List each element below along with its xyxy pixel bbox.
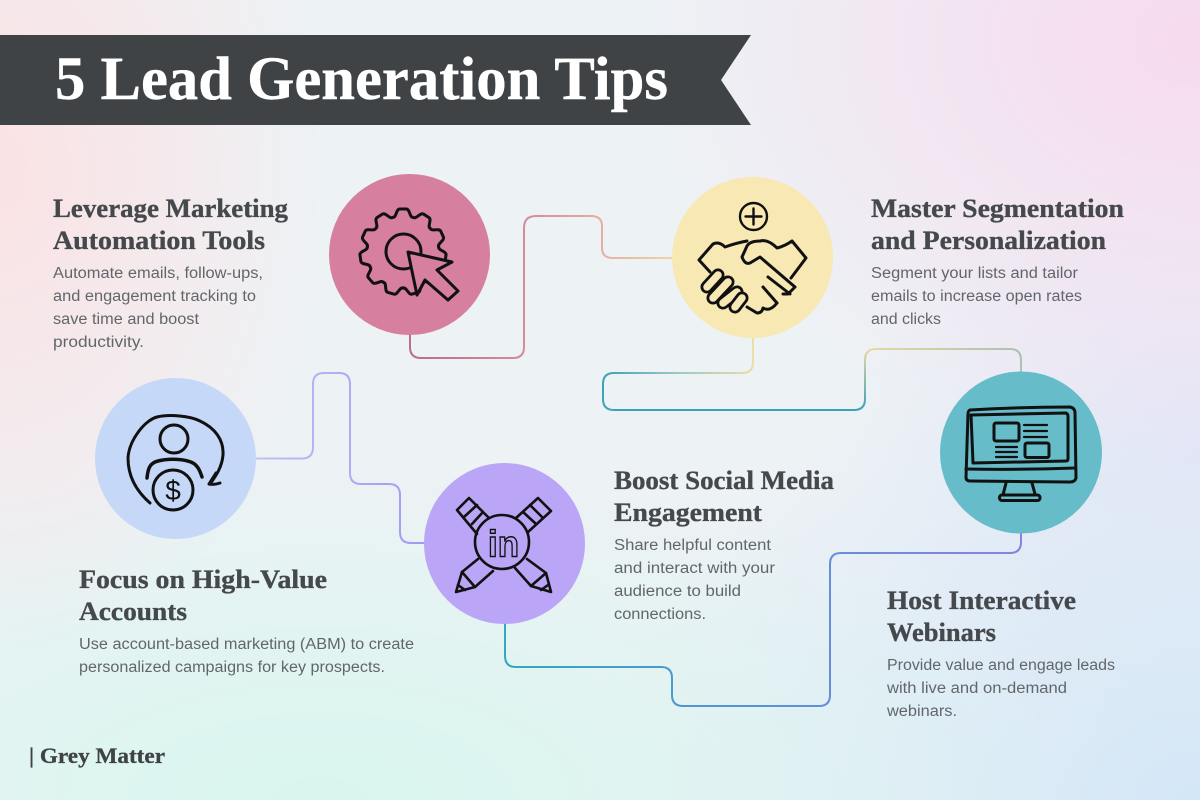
heading bbox=[887, 585, 1076, 647]
body text: webinars. bbox=[886, 703, 957, 720]
body text: connections. bbox=[614, 606, 706, 623]
body text: Segment your lists and tailor bbox=[871, 265, 1078, 282]
heading: Automation Tools bbox=[53, 225, 265, 255]
heading: and Personalization bbox=[871, 225, 1106, 255]
icon circle: blue bbox=[95, 378, 256, 539]
panel: social media bbox=[424, 463, 834, 624]
heading: Accounts bbox=[79, 596, 187, 626]
body text: and interact with your bbox=[614, 560, 775, 577]
icon: desktop monitor bbox=[966, 407, 1076, 500]
brand signature: | Grey Matter bbox=[29, 743, 165, 768]
connector: automation to segmentation bbox=[410, 216, 672, 358]
body text: Provide value and engage leads bbox=[887, 657, 1115, 674]
body text bbox=[79, 636, 414, 676]
icon circle: yellow bbox=[672, 177, 833, 338]
body text: Use account-based marketing (ABM) to create bbox=[79, 636, 414, 653]
connector: segmentation to webinars bbox=[603, 338, 1021, 410]
icon circle: pink bbox=[329, 174, 490, 335]
heading bbox=[79, 564, 327, 626]
panel: high-value accounts bbox=[79, 378, 414, 676]
panel: segmentation bbox=[672, 177, 1124, 338]
heading: Webinars bbox=[887, 617, 996, 647]
banner shape bbox=[0, 35, 751, 125]
icon: dollar sign: $ bbox=[165, 475, 181, 506]
body text bbox=[886, 657, 1115, 720]
body text: save time and boost bbox=[53, 311, 200, 328]
icon circle: purple bbox=[424, 463, 585, 624]
icon: crossed pencils with LinkedIn badge bbox=[456, 498, 551, 592]
title banner bbox=[0, 35, 751, 125]
icon circle: teal bbox=[940, 372, 1102, 534]
body text: audience to build bbox=[614, 583, 741, 600]
body text bbox=[53, 265, 263, 351]
heading: Engagement bbox=[614, 497, 762, 527]
body text: emails to increase open rates bbox=[871, 288, 1082, 305]
body text: personalized campaigns for key prospects. bbox=[79, 659, 385, 676]
heading bbox=[53, 193, 288, 255]
connector: accounts to social bbox=[256, 373, 424, 543]
body text bbox=[614, 537, 775, 623]
title text: 5 Lead Generation Tips bbox=[55, 46, 668, 113]
body text: and engagement tracking to bbox=[53, 288, 256, 305]
panel: marketing automation bbox=[53, 174, 490, 351]
connector: social to webinars bbox=[505, 533, 1021, 706]
panel: webinars bbox=[886, 372, 1115, 720]
heading: Focus on High-Value bbox=[79, 564, 327, 594]
body text: with live and on-demand bbox=[886, 680, 1067, 697]
body text: and clicks bbox=[871, 311, 941, 328]
icon: handshake with plus bbox=[699, 203, 806, 313]
body text bbox=[871, 265, 1082, 328]
body text: Share helpful content bbox=[614, 537, 772, 554]
heading: Leverage Marketing bbox=[53, 193, 288, 223]
body text: Automate emails, follow-ups, bbox=[53, 265, 263, 282]
body text: productivity. bbox=[53, 334, 144, 351]
heading: Master Segmentation bbox=[871, 193, 1124, 223]
heading: Boost Social Media bbox=[614, 465, 834, 495]
icon: in letters: in bbox=[488, 524, 519, 564]
icon: gear and cursor bbox=[359, 209, 458, 300]
heading bbox=[871, 193, 1124, 255]
heading: Host Interactive bbox=[887, 585, 1076, 615]
icon: person with coin and arrow bbox=[128, 416, 223, 510]
heading bbox=[614, 465, 834, 527]
